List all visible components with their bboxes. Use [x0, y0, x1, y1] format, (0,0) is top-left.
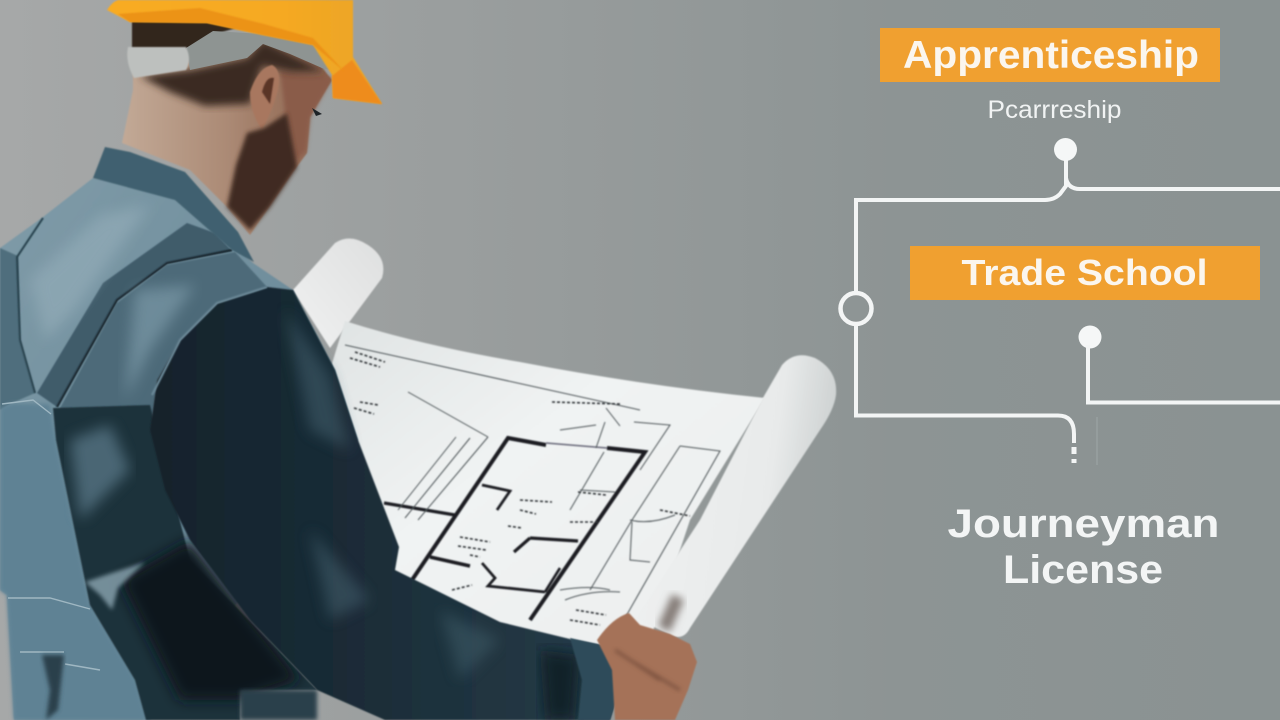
neck and head	[122, 40, 332, 235]
connector lines to apprenticeship	[856, 160, 1066, 292]
label: journeyman license	[948, 502, 1220, 592]
hat brim shade	[332, 60, 382, 104]
photo: rolled blueprint	[293, 238, 836, 660]
hair below strap	[140, 40, 325, 106]
sleeve seam	[152, 287, 267, 395]
hat strap	[186, 31, 346, 74]
blueprint top roll	[293, 238, 383, 348]
hand blur mark on roll	[658, 594, 684, 632]
node: ring	[840, 293, 872, 324]
beard	[227, 113, 297, 230]
sleeve highlights	[285, 310, 370, 620]
left side panel	[0, 248, 35, 410]
lower denim panel	[0, 403, 146, 720]
jacket silhouette	[0, 178, 358, 720]
eye	[312, 108, 322, 116]
label: trade school: Trade School	[962, 252, 1208, 293]
photo: worker	[0, 0, 697, 720]
node: apprenticeship dot	[1054, 138, 1077, 161]
connector to journeyman license	[856, 325, 1074, 463]
dark sleeve	[150, 287, 617, 720]
collar	[93, 147, 254, 262]
ear	[250, 65, 279, 130]
shoulder band region	[60, 252, 267, 440]
label: journeyman license: Journeyman	[948, 502, 1220, 546]
hair back and top	[132, 16, 250, 50]
hard hat	[107, 0, 382, 104]
jacket hem	[240, 690, 317, 720]
label: apprenticeship	[880, 28, 1220, 82]
body fold highlights	[85, 562, 145, 610]
label: apprenticeship: Apprenticeship	[903, 34, 1199, 77]
blueprint sheet	[330, 321, 765, 660]
denim dark fold	[42, 655, 64, 720]
label: journeyman license: License	[1003, 548, 1163, 592]
knuckle shading	[615, 650, 680, 690]
faint tick	[1096, 417, 1098, 465]
hand	[597, 613, 697, 720]
node: trade school dot	[1078, 326, 1102, 348]
blueprint right roll	[636, 355, 836, 637]
floor plan drawing	[345, 345, 720, 625]
pathway connector: upper branch	[856, 160, 1280, 292]
strap across back	[37, 223, 232, 407]
cuff	[570, 638, 617, 720]
darkest body core	[120, 540, 300, 700]
strap dark edge	[57, 250, 232, 407]
label: trade school	[910, 246, 1260, 300]
sublabel: Pcarrreship	[988, 96, 1122, 124]
denim seams	[2, 400, 100, 670]
connector from trade school	[1088, 345, 1280, 402]
face shadow	[280, 70, 332, 165]
fold highlights	[30, 205, 150, 340]
shoulder outline	[17, 218, 43, 393]
inner dark body	[53, 405, 317, 720]
